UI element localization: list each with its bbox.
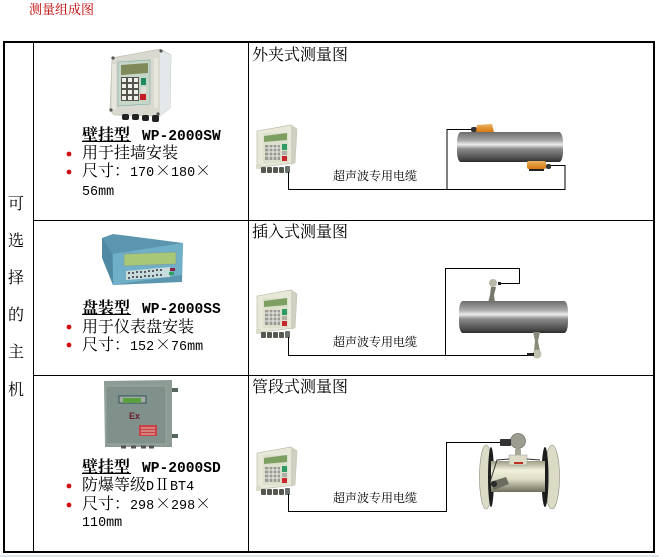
model name: 壁挂型	[82, 125, 130, 144]
cable wiring	[288, 268, 533, 356]
device photo: explosion proof unit: Ex	[129, 411, 140, 421]
bullet list: ×	[195, 491, 211, 514]
model name	[82, 125, 221, 145]
bullet list: ×	[155, 491, 171, 514]
bullet list: 298	[171, 499, 195, 514]
bullet list: 152	[130, 340, 154, 355]
bullet list: 180	[171, 166, 195, 181]
bullet list: 170	[130, 166, 154, 181]
bullet list: 尺寸：	[82, 163, 130, 180]
pipe with insertion sensors	[459, 279, 568, 358]
cable label: 超声波专用电缆	[333, 490, 417, 505]
bullet list: 尺寸：	[82, 496, 130, 513]
panel: panel mounted WP-2000SS	[67, 234, 221, 355]
bullet list: 尺寸：	[82, 337, 130, 354]
device photo: wall mounted unit	[109, 49, 171, 122]
bullet list: D	[146, 480, 154, 495]
model name: 壁挂型	[82, 457, 130, 476]
page title: 测量组成图	[29, 2, 94, 17]
bullet list: 防爆等级	[82, 477, 146, 494]
bullet list: 110mm	[82, 516, 122, 531]
model name: 盘装型	[82, 298, 130, 317]
bullet list: 298	[130, 499, 154, 514]
pipe with clamp sensors	[457, 124, 563, 171]
bullet list: ×	[155, 158, 171, 181]
model name: WP-2000SD	[142, 461, 221, 477]
panel: clamp-on measurement diagram	[252, 46, 565, 190]
icon: host unit	[256, 447, 297, 495]
diagram heading: 插入式测量图	[252, 222, 348, 241]
panel: insertion measurement diagram	[252, 222, 568, 358]
cable wiring	[288, 130, 565, 190]
diagram heading: 管段式测量图	[252, 378, 348, 396]
panel: spool section measurement diagram	[252, 378, 560, 512]
side heading: optional host units: 可	[8, 195, 24, 213]
side heading: optional host units: 择	[8, 269, 24, 287]
side heading: optional host units: 机	[8, 381, 24, 399]
diagram heading: 外夹式测量图	[252, 46, 348, 64]
bullet list: BT4	[170, 480, 194, 495]
device photo: explosion proof unit	[104, 380, 178, 447]
bullet list: 用于挂墙安装	[82, 144, 178, 162]
bullet list: ×	[195, 158, 211, 181]
model name: WP-2000SS	[142, 302, 221, 318]
icon: host unit	[256, 125, 297, 173]
bullet list	[67, 144, 211, 200]
bullet list: 56mm	[82, 185, 114, 200]
bullet list: Ⅱ	[154, 472, 170, 495]
bullet list: 76mm	[171, 340, 203, 355]
panel: wall mounted WP-2000SD	[67, 380, 221, 531]
bullet list: ×	[155, 332, 171, 355]
side heading: optional host units: 选	[8, 232, 24, 250]
bottom window edge	[0, 555, 659, 557]
side heading: optional host units	[8, 195, 24, 399]
cable wiring	[288, 442, 500, 512]
cable label: 超声波专用电缆	[333, 168, 417, 183]
side heading: optional host units: 主	[8, 343, 24, 361]
bullet list	[67, 317, 203, 355]
device photo: panel mounted unit	[102, 234, 183, 285]
bullet list: 用于仪表盘安装	[82, 317, 194, 336]
panel: wall mounted WP-2000SW	[67, 49, 221, 200]
model name	[82, 298, 221, 318]
cable label: 超声波专用电缆	[333, 334, 417, 349]
spool flow meter	[480, 434, 560, 509]
icon: host unit	[256, 290, 297, 338]
bullet list	[67, 472, 211, 531]
model name: WP-2000SW	[142, 129, 221, 145]
model name	[82, 457, 221, 477]
side heading: optional host units: 的	[8, 306, 24, 324]
